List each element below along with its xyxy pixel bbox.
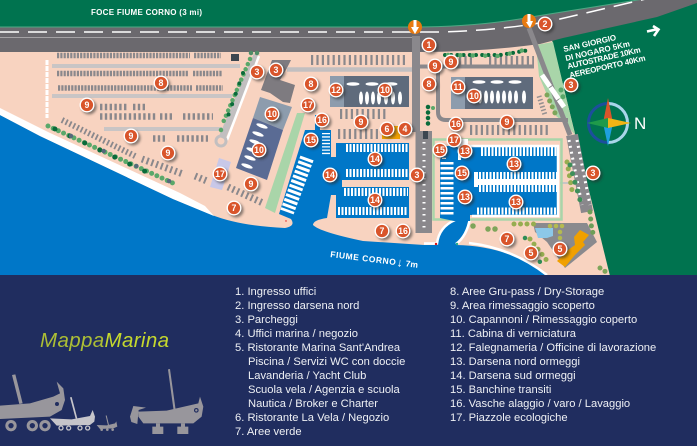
road edge line <box>0 36 412 38</box>
map label: road distances: DI NOGARO 5Km <box>564 39 631 63</box>
marker 8: 8 <box>309 79 314 89</box>
north darsena boats <box>444 146 557 216</box>
marker 17: 17 <box>449 135 459 145</box>
map label: Fiume Corno depth <box>330 247 419 272</box>
legend column 2: 11. Cabina di verniciatura <box>450 328 577 340</box>
legend column 1 <box>235 286 405 438</box>
peach block north entrance <box>432 50 537 66</box>
map label: Fiume Corno depth: ↓ <box>396 255 404 270</box>
marker 15 <box>304 133 320 150</box>
marker 16: 16 <box>398 226 408 236</box>
marker 5 <box>553 242 570 258</box>
marker 13 <box>458 144 474 160</box>
map label: Fiume Corno depth: FIUME CORNO <box>330 249 397 267</box>
dashed white marker column <box>46 60 48 118</box>
marker 14 <box>323 168 340 184</box>
pool <box>535 228 553 238</box>
road centre dashes <box>0 0 650 32</box>
green strip <box>265 113 305 213</box>
marker 17: 17 <box>303 100 313 110</box>
west access road <box>216 55 259 146</box>
marker 9 <box>244 177 260 194</box>
legend column 1: Piscina / Servizi WC con doccie <box>248 356 405 368</box>
green background <box>0 0 697 276</box>
central pier <box>474 172 478 187</box>
marker 9 <box>80 98 96 114</box>
north darsena green border <box>434 140 562 220</box>
resort area gray <box>533 223 597 268</box>
legend column 2: 10. Capannoni / Rimessaggio coperto <box>450 314 637 326</box>
map label: road distances: SAN GIORGIO <box>562 33 617 54</box>
entry marker: uffici <box>408 20 422 34</box>
main vertical road <box>412 36 432 233</box>
legend column 1: 6. Ristorante La Vela / Negozio <box>235 412 389 424</box>
marker 1 <box>422 38 438 54</box>
marker 2 <box>538 17 554 34</box>
marker 11: 11 <box>453 82 463 92</box>
legend panel background <box>0 275 697 446</box>
marker 4 <box>398 122 414 138</box>
icon: compass <box>587 98 646 146</box>
legend column 2: 15. Banchine transiti <box>450 384 551 396</box>
marker 8: 8 <box>427 79 432 89</box>
marker 9: 9 <box>433 61 438 71</box>
marker 8 <box>422 77 438 94</box>
marker 7: 7 <box>380 226 385 236</box>
marker 12 <box>329 83 346 100</box>
marker 10 <box>265 107 282 124</box>
marker 6 <box>380 122 396 138</box>
marker 14: 14 <box>370 154 380 164</box>
marker 9 <box>354 115 370 132</box>
marker 7 <box>500 232 516 248</box>
marker 10 <box>378 83 394 100</box>
large boat on wheels <box>0 374 65 431</box>
harbour mouth lights <box>285 218 458 245</box>
marker 3: 3 <box>569 80 574 90</box>
marker 7: 7 <box>505 234 510 244</box>
marker 10 <box>467 89 484 106</box>
road to parking <box>287 67 412 72</box>
marker 1: 1 <box>427 40 432 50</box>
marker 9 <box>500 115 516 132</box>
legend column 2: 9. Area rimessaggio scoperto <box>450 300 595 312</box>
marker 9: 9 <box>85 100 90 110</box>
light green area by north entrance <box>536 42 575 135</box>
legend column 2: 13. Darsena nord ormeggi <box>450 356 580 368</box>
marker 10: 10 <box>254 145 264 155</box>
marker 16: 16 <box>451 119 461 129</box>
marker 3 <box>586 166 602 182</box>
marker 16 <box>396 224 412 240</box>
marker 3: 3 <box>255 67 260 77</box>
marker 13: 13 <box>460 192 470 202</box>
orange building 6 <box>382 126 400 139</box>
marker 7 <box>375 224 392 240</box>
marker 17: 17 <box>215 169 225 179</box>
marker 5: 5 <box>558 244 563 254</box>
marker 17 <box>213 167 230 184</box>
lavender eco area 17 <box>210 158 231 190</box>
orange restaurant building <box>557 230 589 267</box>
land <box>0 40 610 276</box>
north road loop <box>420 28 570 135</box>
service roads west <box>52 66 240 129</box>
map label: road distances <box>562 33 646 80</box>
logo: MappaMarina: MappaMarina <box>40 329 169 352</box>
marker 9 <box>124 129 140 146</box>
marker 9: 9 <box>129 131 134 141</box>
marker 2: 2 <box>543 19 548 29</box>
marker 9: 9 <box>359 117 364 127</box>
legend column 1: Scuola vela / Agenzia e scuola <box>248 384 401 396</box>
marker 14 <box>368 152 384 168</box>
marker 10: 10 <box>469 91 479 101</box>
marker 9 <box>161 146 178 162</box>
shed 10 lower west <box>236 118 283 180</box>
icon: boats on wheels and on stands <box>0 369 203 434</box>
map label: road distances: AUTOSTRADE 10Km <box>566 45 642 71</box>
parking spaces on vertical road <box>422 142 426 228</box>
legend column 2: 17. Piazzole ecologiche <box>450 412 568 424</box>
marker 17 <box>301 98 318 114</box>
map label: Foce Fiume Corno: FOCE FIUME CORNO (3 mi) <box>91 8 202 17</box>
legend column 2: 12. Falegnameria / Officine di lavorazione <box>450 342 656 354</box>
marker 16: 16 <box>317 115 327 125</box>
marker 15: 15 <box>306 135 316 145</box>
medium boat on wheels <box>50 397 95 431</box>
legend column 1: 5. Ristorante Marina Sant'Andrea <box>235 342 401 354</box>
marker 3 <box>564 78 580 94</box>
marker 9: 9 <box>449 57 454 67</box>
dry storage boat rows <box>57 56 549 203</box>
legend column 1: 4. Uffici marina / negozio <box>235 328 358 340</box>
marker 9 <box>444 55 460 72</box>
marker 10: 10 <box>380 85 390 95</box>
marker 15: 15 <box>435 145 445 155</box>
marker 4: 4 <box>403 124 408 134</box>
marker 16 <box>315 113 332 130</box>
legend column 2: 14. Darsena sud ormeggi <box>450 370 576 382</box>
marker 8 <box>154 76 170 92</box>
marker 13: 13 <box>509 159 519 169</box>
icon: direction arrow <box>647 26 658 36</box>
marker 13 <box>458 190 474 206</box>
water <box>0 115 548 276</box>
marker 13 <box>507 157 524 174</box>
marker 15: 15 <box>457 168 467 178</box>
marker 9: 9 <box>166 148 171 158</box>
legend column 2: 16. Vasche alaggio / varo / Lavaggio <box>450 398 630 410</box>
legend column 2 <box>450 286 656 424</box>
entry marker: darsena nord <box>522 14 536 28</box>
shed 10 upper west <box>253 97 292 130</box>
west tree line <box>48 53 263 185</box>
shed 11 and 10 east <box>451 77 533 109</box>
marker 8 <box>304 77 320 94</box>
marker 14 <box>368 193 384 210</box>
marker 3: 3 <box>591 168 596 178</box>
marker 11 <box>451 80 468 96</box>
marker 7: 7 <box>232 203 237 213</box>
marker 3 <box>269 63 286 80</box>
marker 8: 8 <box>159 78 164 88</box>
resort trees <box>473 212 606 272</box>
numbered markers <box>80 17 602 263</box>
marker 10: 10 <box>267 109 277 119</box>
marker 3 <box>410 168 426 184</box>
marker 13: 13 <box>460 146 470 156</box>
marker 17 <box>447 133 464 150</box>
marker 3: 3 <box>415 170 420 180</box>
north darsena basin <box>438 139 560 221</box>
trees north <box>428 48 580 200</box>
marker 5: 5 <box>529 248 534 258</box>
marker 3: 3 <box>274 65 279 75</box>
parking west dark <box>261 60 295 103</box>
small dark kiosk <box>231 54 239 61</box>
marker 12: 12 <box>331 85 341 95</box>
legend column 1: Lavanderia / Yacht Club <box>248 370 366 382</box>
white parking strip north <box>542 75 564 107</box>
legend column 1: Nautica / Broker e Charter <box>248 398 378 410</box>
marker 10 <box>252 143 268 160</box>
boat on stands <box>130 369 203 434</box>
legend column 1: 3. Parcheggi <box>235 314 298 326</box>
marker 15 <box>455 166 472 182</box>
map label: road distances: AEREOPORTO 40Km <box>568 54 646 80</box>
shed 12 and 10 central <box>330 76 409 107</box>
marker 14: 14 <box>370 195 380 205</box>
legend column 2: 8. Aree Gru-pass / Dry-Storage <box>450 286 604 298</box>
legend column 1: 7. Aree verde <box>235 426 302 438</box>
road <box>0 0 697 52</box>
lower parking strip <box>558 135 590 212</box>
marker 3 <box>250 65 266 82</box>
marker 9: 9 <box>505 117 510 127</box>
marker 13 <box>509 195 526 212</box>
small boat on wheels <box>97 415 117 431</box>
marker 7 <box>227 201 244 218</box>
marker 5 <box>524 246 540 262</box>
map label: Fiume Corno depth: 7m <box>405 258 419 270</box>
marker 15 <box>433 143 450 160</box>
marker 13: 13 <box>511 197 521 207</box>
shoreline white <box>0 108 214 216</box>
marker 14: 14 <box>325 170 335 180</box>
legend column 1: 1. Ingresso uffici <box>235 286 316 298</box>
compass N: N <box>634 114 646 133</box>
marker 6: 6 <box>385 124 390 134</box>
marker 9 <box>428 59 444 76</box>
south darsena boat rows <box>287 133 408 212</box>
marker 16 <box>449 117 466 134</box>
marker 9: 9 <box>249 179 254 189</box>
legend column 1: 2. Ingresso darsena nord <box>235 300 359 312</box>
